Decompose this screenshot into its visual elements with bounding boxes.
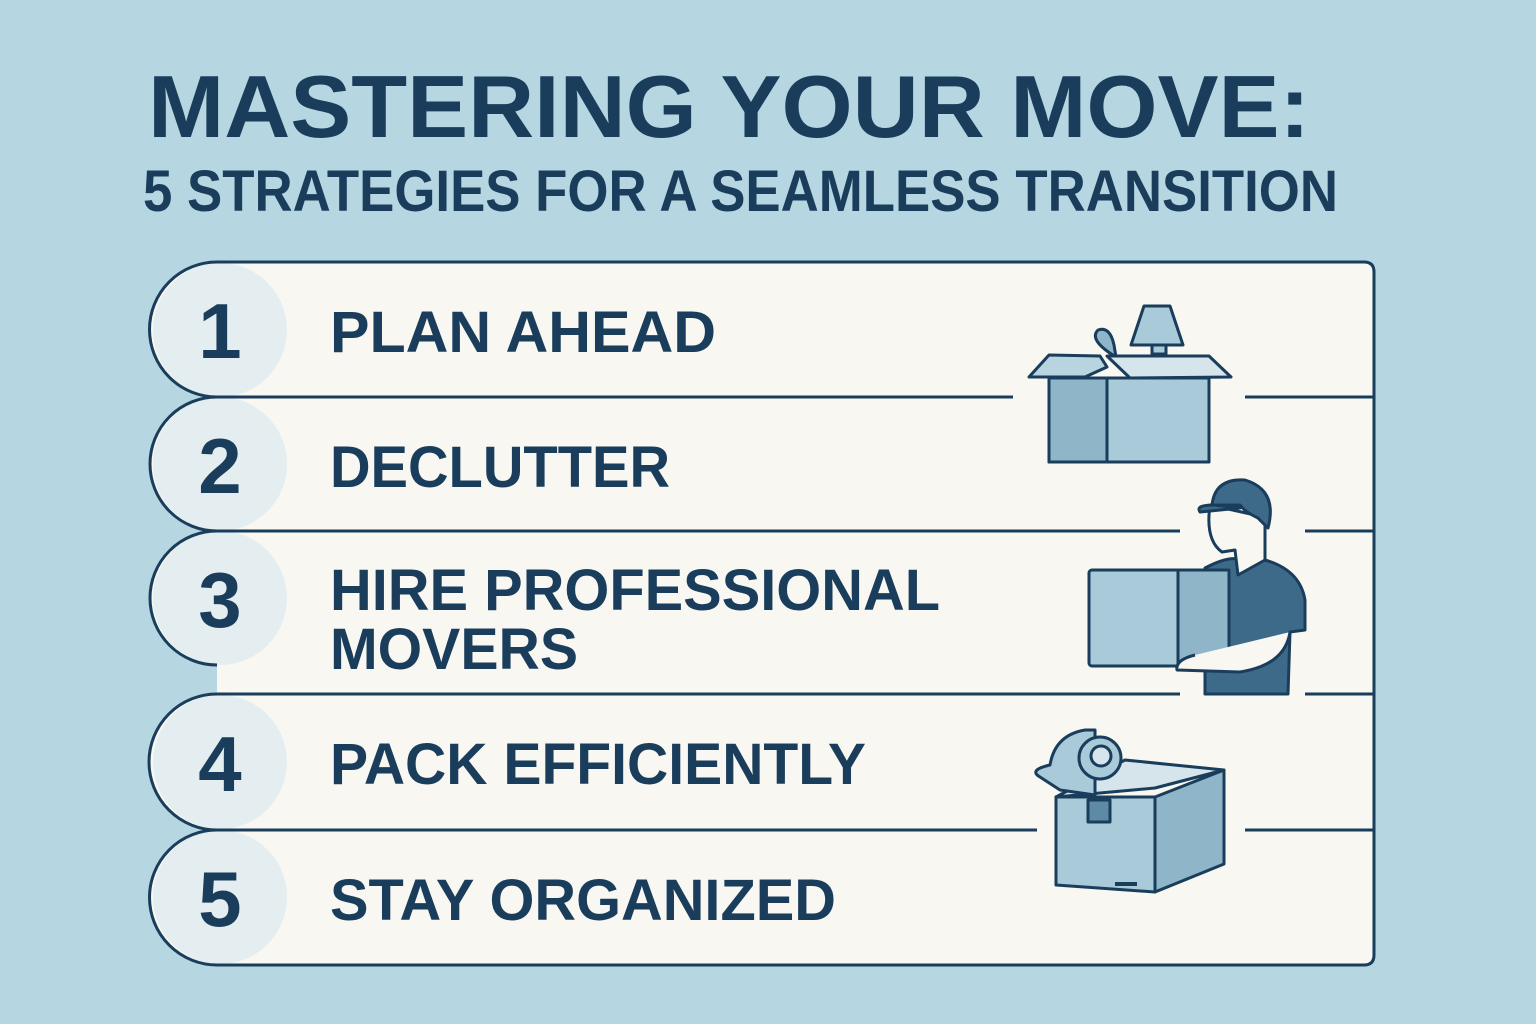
item labels: STAY ORGANIZED — [330, 868, 836, 933]
item labels: PLAN AHEAD — [330, 300, 716, 365]
panel: strategies list — [149, 262, 1374, 965]
icon: mover carrying box — [1089, 480, 1305, 694]
numbers: 2 — [198, 422, 242, 510]
icon: open box with lamp — [1029, 306, 1231, 462]
item labels: PACK EFFICIENTLY — [330, 732, 866, 797]
icon: box with tape roll — [1036, 730, 1224, 892]
title: MASTERING YOUR MOVE: — [148, 57, 1310, 156]
subtitle: 5 STRATEGIES FOR A SEAMLESS TRANSITION — [143, 159, 1338, 224]
numbers: 3 — [198, 556, 242, 644]
title — [143, 57, 1338, 224]
numbers: 1 — [198, 287, 242, 375]
item labels: HIRE PROFESSIONAL — [330, 558, 940, 623]
numbers: 5 — [198, 855, 242, 943]
numbers — [198, 287, 242, 943]
item labels: DECLUTTER — [330, 435, 670, 500]
item labels: MOVERS — [330, 617, 578, 682]
item labels — [330, 300, 940, 933]
numbers: 4 — [198, 720, 242, 808]
